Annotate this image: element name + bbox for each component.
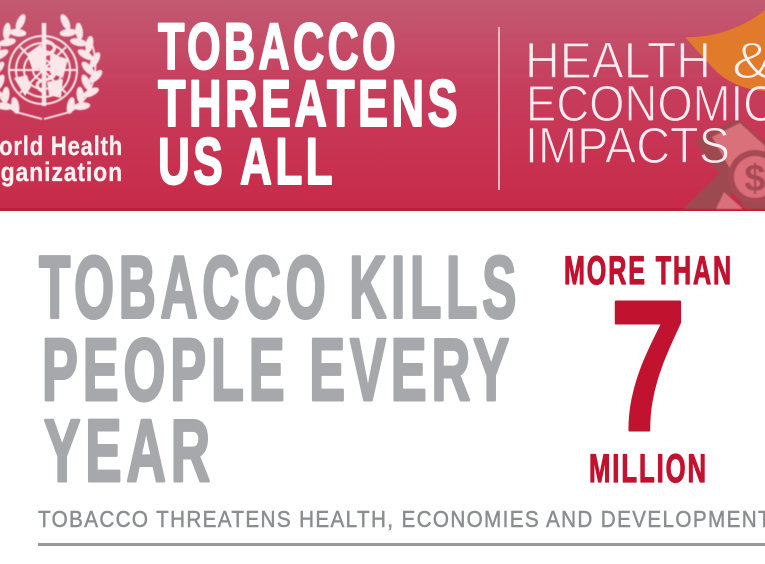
banner subtitle: HEALTH <box>525 32 711 89</box>
icon: money with cross <box>683 118 765 209</box>
header banner <box>0 0 765 211</box>
continents <box>14 44 68 98</box>
statistic: more than 7 million <box>564 249 733 491</box>
banner title: THREATENS <box>158 66 461 140</box>
banner title <box>158 9 461 198</box>
main heading <box>39 238 521 500</box>
divider <box>498 27 500 190</box>
rule <box>38 543 765 546</box>
icon: orange flame <box>685 10 765 91</box>
big number: 7 <box>610 263 686 470</box>
organization name <box>0 131 123 187</box>
banner subtitle: IMPACTS <box>525 117 730 174</box>
main heading: YEAR <box>44 401 215 500</box>
icon: money with cross: $ <box>744 158 765 200</box>
laurel wreath <box>0 13 104 119</box>
staff and serpent <box>34 23 54 106</box>
globe <box>9 36 77 104</box>
banner title: TOBACCO <box>158 9 399 83</box>
banner title: US ALL <box>158 124 336 198</box>
banner subtitle <box>525 32 765 174</box>
icon: WHO emblem <box>0 13 104 119</box>
